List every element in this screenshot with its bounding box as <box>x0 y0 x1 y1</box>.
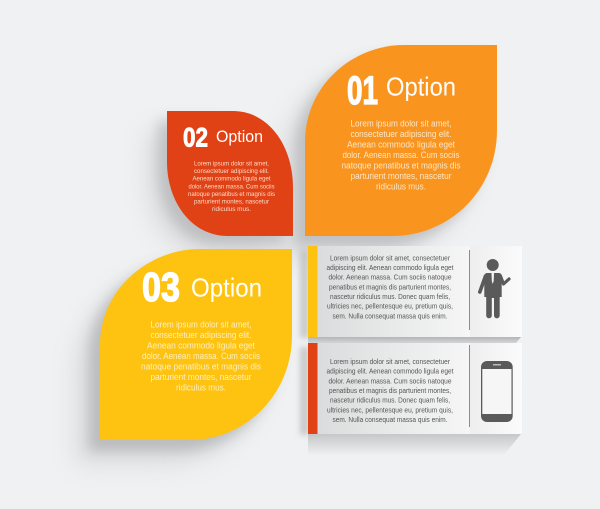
text block: phone card: ultricies nec, pellentesque eu, pretium quis, <box>327 405 453 414</box>
text block: phone card: adipiscing elit. Aenean commodo ligula eget <box>326 367 454 376</box>
text block: phone card: Lorem ipsum dolor sit amet, consectetuer <box>330 357 450 366</box>
text block: option 02 body <box>188 160 276 213</box>
text block: option 02 body: natoque penatibus et magnis dis <box>188 191 276 198</box>
text block: option 01 body: consectetuer adipiscing elit. <box>350 129 452 139</box>
panel: option 02 leaf <box>147 111 293 256</box>
text block: option 02 body: ridiculus mus. <box>212 206 251 213</box>
text block: option 02 body: consectetuer adipiscing elit. <box>194 168 269 175</box>
text block: option 01 body: parturient montes, nascetur <box>350 171 452 181</box>
text block: person card: ultricies nec, pellentesque eu, pretium quis, <box>327 302 453 311</box>
text block: phone card: nascetur ridiculus mus. Donec quam felis, <box>330 396 450 405</box>
text block: person card: penatibus et magnis dis parturient montes, <box>329 282 451 291</box>
text block: phone card: sem. Nulla consequat massa quis enim. <box>332 415 448 424</box>
panel: option 03 leaf <box>76 249 292 464</box>
panel: option 01 leaf <box>281 45 497 260</box>
panel: phone card <box>300 343 522 455</box>
number 03: 03 <box>142 264 180 310</box>
heading: option: Option <box>191 272 262 302</box>
text block: option 03 body: dolor. Aenean massa. Cum sociis <box>142 351 260 361</box>
text block: person card: dolor. Aenean massa. Cum sociis natoque <box>328 273 452 282</box>
text block: option 01 body: Aenean commodo ligula eget <box>347 140 455 150</box>
text block: option 02 body: parturient montes, nascetur <box>194 198 270 206</box>
text block: option 01 body: ridiculus mus. <box>376 182 426 192</box>
text block: option 02 body: Aenean commodo ligula eget <box>192 176 271 183</box>
text block: option 01 body: dolor. Aenean massa. Cum sociis <box>342 150 460 160</box>
text block: phone card: dolor. Aenean massa. Cum sociis natoque <box>328 376 452 385</box>
text block: option 01 body: Lorem ipsum dolor sit amet, <box>350 118 452 128</box>
heading: option: Option <box>386 72 456 102</box>
text block: option 02 body: Lorem ipsum dolor sit amet, <box>194 160 269 168</box>
text block: person card: Lorem ipsum dolor sit amet, consectetuer <box>330 253 450 262</box>
text block: option 03 body <box>141 320 261 393</box>
text block: option 01 body: natoque penatibus et magnis dis <box>342 160 461 170</box>
accent stripe <box>308 246 318 337</box>
number 02: 02 <box>183 122 208 152</box>
heading: option: Option <box>216 127 263 146</box>
text block: option 03 body: consectetuer adipiscing elit. <box>150 330 252 340</box>
text block: option 03 body: Lorem ipsum dolor sit amet, <box>150 320 252 330</box>
number 01: 01 <box>347 69 378 113</box>
text block: option 03 body: Aenean commodo ligula eget <box>147 341 255 351</box>
text block: option 03 body: ridiculus mus. <box>176 383 226 393</box>
text block: person card: nascetur ridiculus mus. Donec quam felis, <box>330 292 450 301</box>
text block: person card: sem. Nulla consequat massa quis enim. <box>332 311 448 320</box>
text block: person card: adipiscing elit. Aenean commodo ligula eget <box>326 263 454 272</box>
text block: option 03 body: natoque penatibus et magnis dis <box>141 362 261 372</box>
text block: person card <box>326 253 454 320</box>
text block: option 02 body: dolor. Aenean massa. Cum sociis <box>188 183 275 190</box>
text block: option 01 body <box>342 118 461 192</box>
icon: smartphone <box>481 361 513 422</box>
text block: phone card: penatibus et magnis dis parturient montes, <box>329 386 451 395</box>
panel: person card <box>300 246 522 343</box>
text block: phone card <box>326 357 454 424</box>
icon: businessman <box>480 259 509 318</box>
accent stripe <box>308 343 318 434</box>
text block: option 03 body: parturient montes, nascetur <box>150 372 252 382</box>
